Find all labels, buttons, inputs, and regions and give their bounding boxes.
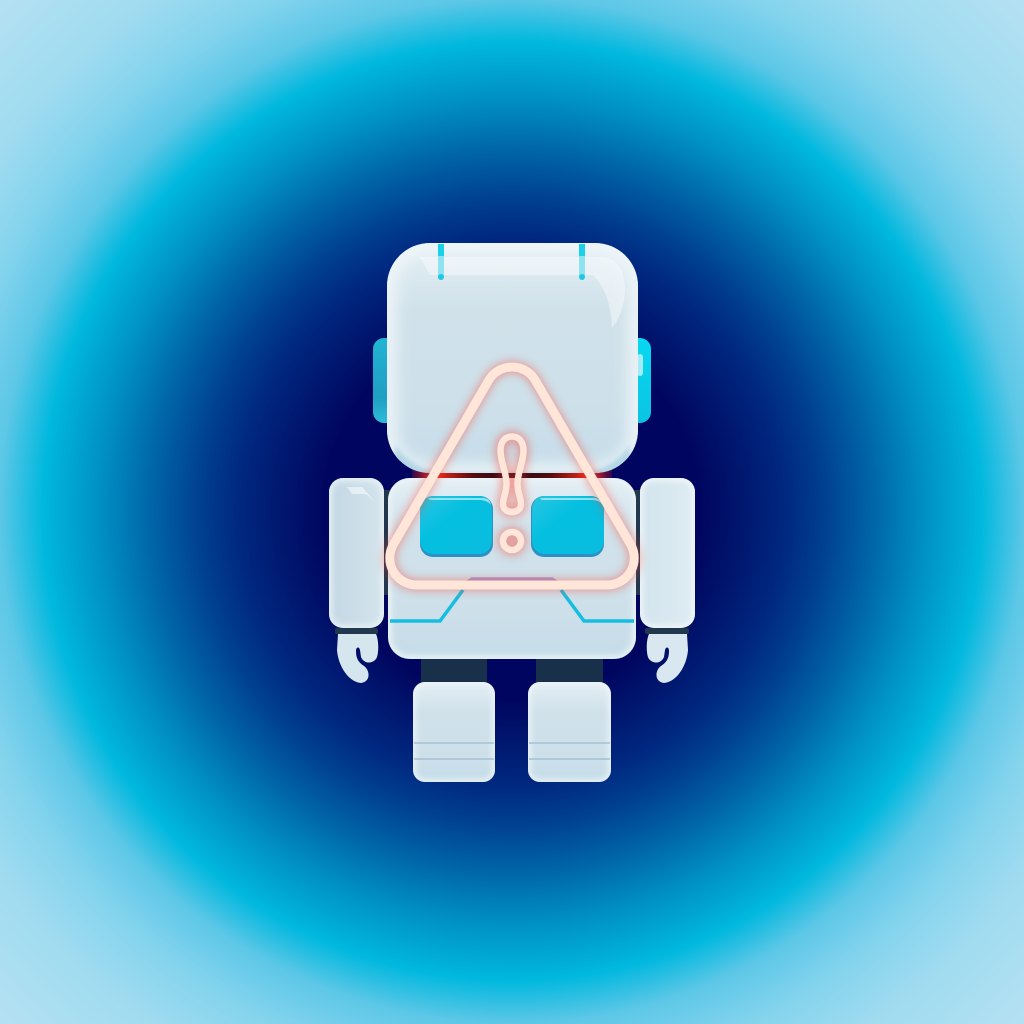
icon: left ear [373, 338, 403, 423]
red glow [390, 367, 634, 585]
neck gap glow [412, 468, 612, 482]
exclamation stem [500, 436, 524, 512]
triangle outline [390, 367, 634, 585]
left chest panel [420, 496, 493, 557]
icon: right ear [621, 338, 651, 423]
antenna lines [438, 244, 585, 280]
right chest panel [531, 496, 604, 557]
robot head [387, 243, 638, 480]
warning triangle [390, 367, 634, 585]
exclamation dot [503, 532, 521, 550]
robot torso [388, 478, 636, 659]
robot legs [413, 655, 611, 782]
left hand [337, 634, 378, 683]
right hand [647, 634, 688, 683]
torso circuit lines [390, 590, 634, 621]
robot right arm [634, 478, 695, 683]
robot [329, 243, 695, 782]
robot left arm [329, 478, 390, 683]
